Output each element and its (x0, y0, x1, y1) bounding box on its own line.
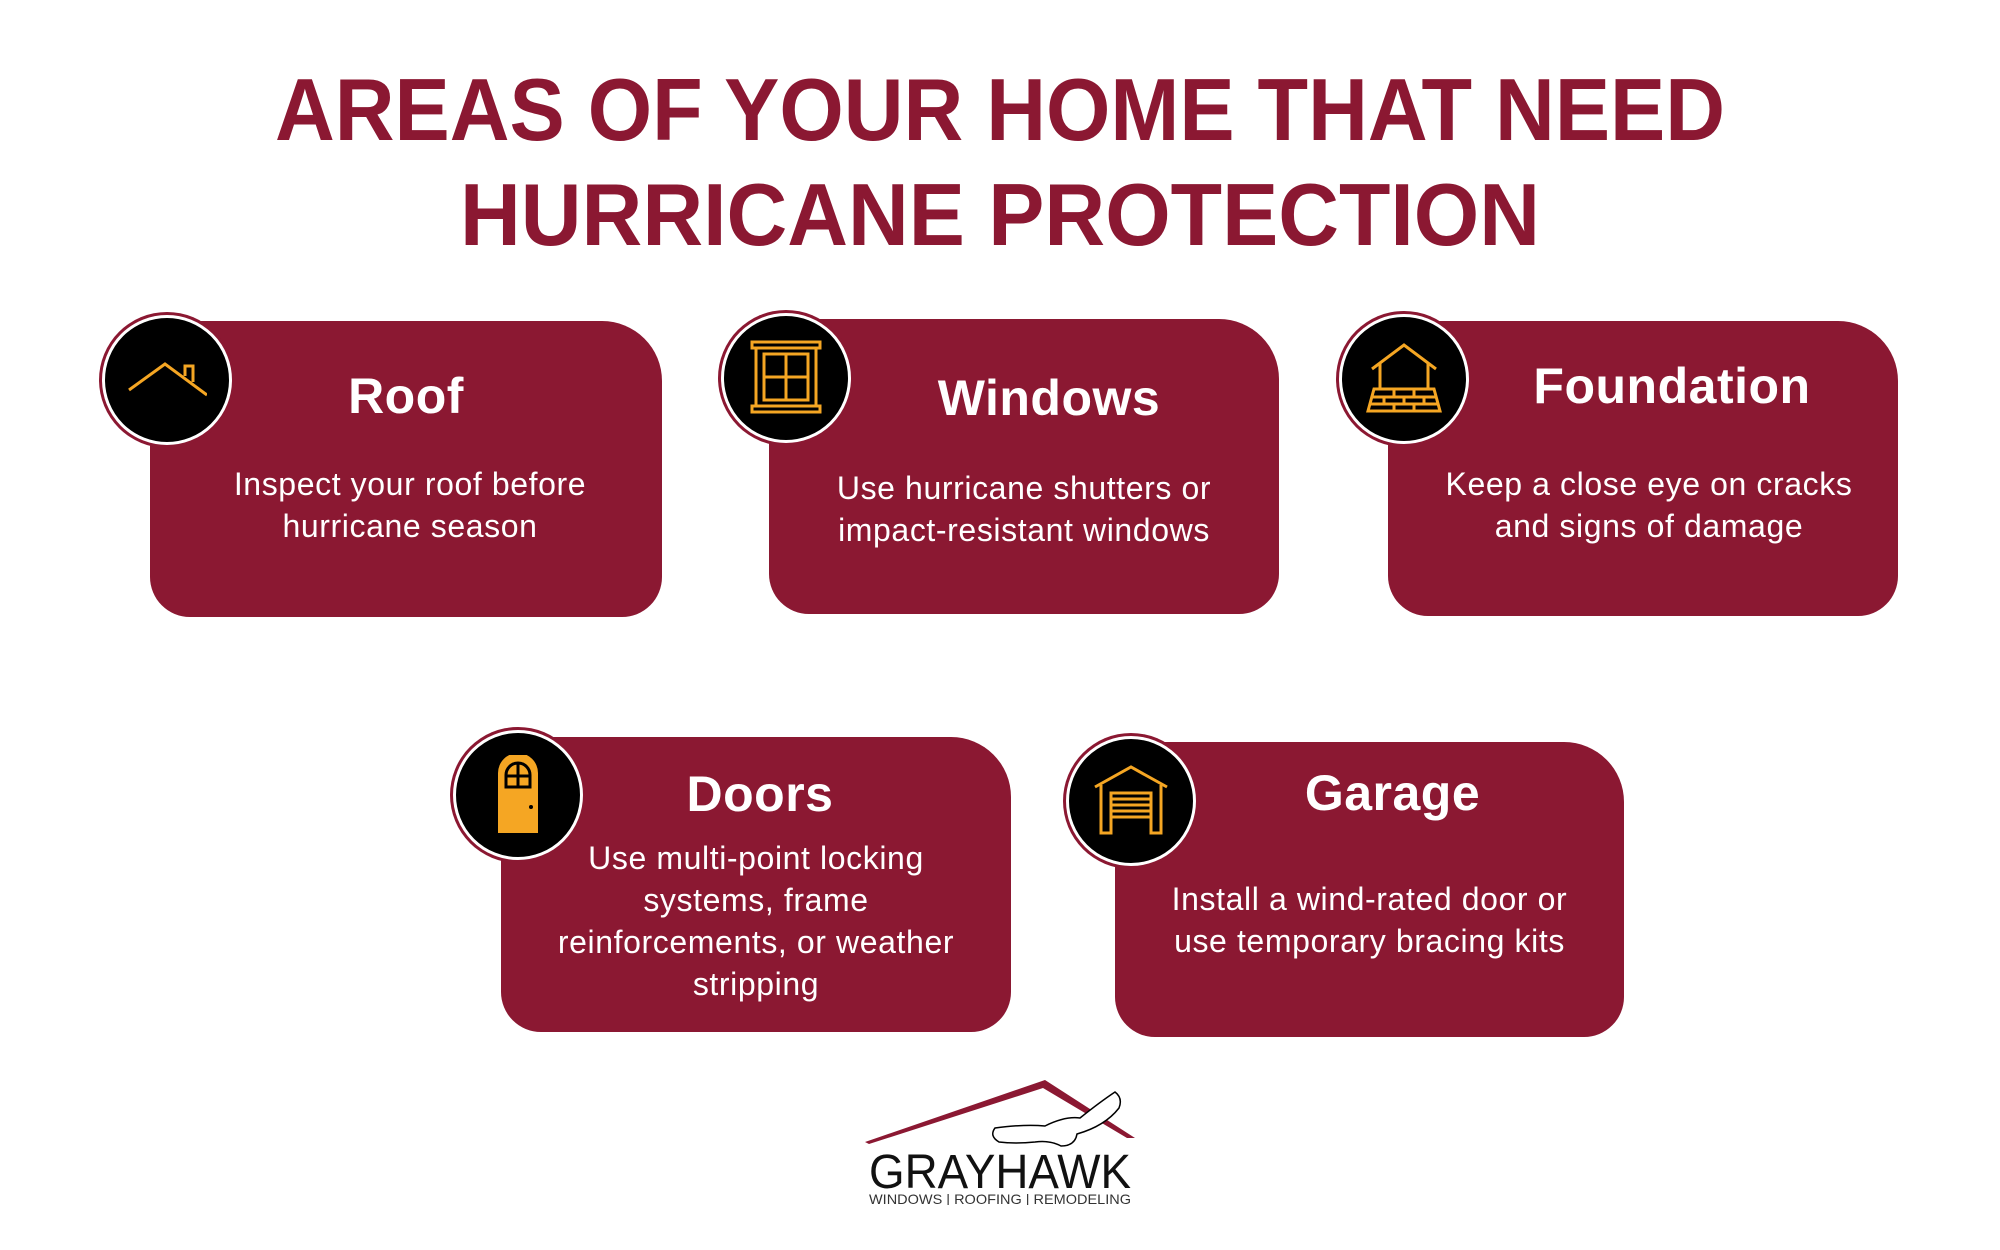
text: roof: hurricane season (282, 508, 538, 544)
title: HURRICANE PROTECTION (460, 165, 1540, 264)
text: foundation: Keep a close eye on cracks (1446, 466, 1852, 502)
text: roof (234, 466, 586, 544)
panel: garage (1115, 742, 1624, 1037)
text: garage: Install a wind-rated door or (1172, 881, 1567, 917)
title: AREAS OF YOUR HOME THAT NEED (275, 60, 1725, 159)
text: roof: Inspect your roof before (234, 466, 586, 502)
panel: doors (501, 737, 1011, 1032)
text: doors: systems, frame (643, 882, 869, 918)
icon: hawk (993, 1092, 1120, 1146)
text: foundation: and signs of damage (1495, 508, 1803, 544)
icon: doors (453, 730, 583, 860)
heading: roof: Roof (348, 368, 464, 424)
panel: foundation (1388, 321, 1898, 616)
heading: doors: Doors (687, 766, 833, 822)
icon: foundation (1339, 314, 1469, 444)
icon: windows (721, 313, 851, 443)
text: garage (1172, 881, 1567, 959)
title (275, 60, 1725, 264)
text: doors (558, 840, 954, 1002)
text: doors: stripping (693, 966, 819, 1002)
panel: windows (769, 319, 1279, 614)
text: doors: Use multi-point locking (588, 840, 924, 876)
icon: roof (102, 315, 232, 445)
icon: garage (1066, 736, 1196, 866)
heading: garage: Garage (1305, 765, 1480, 821)
heading: foundation: Foundation (1533, 358, 1811, 414)
text: windows: Use hurricane shutters or (837, 470, 1211, 506)
text: garage: use temporary bracing kits (1174, 923, 1565, 959)
text: windows (837, 470, 1211, 548)
text: windows: impact-resistant windows (838, 512, 1210, 548)
panel: roof (150, 321, 662, 617)
text: doors: reinforcements, or weather (558, 924, 954, 960)
text: foundation (1446, 466, 1852, 544)
heading: windows: Windows (938, 370, 1160, 426)
logo (865, 1080, 1135, 1205)
